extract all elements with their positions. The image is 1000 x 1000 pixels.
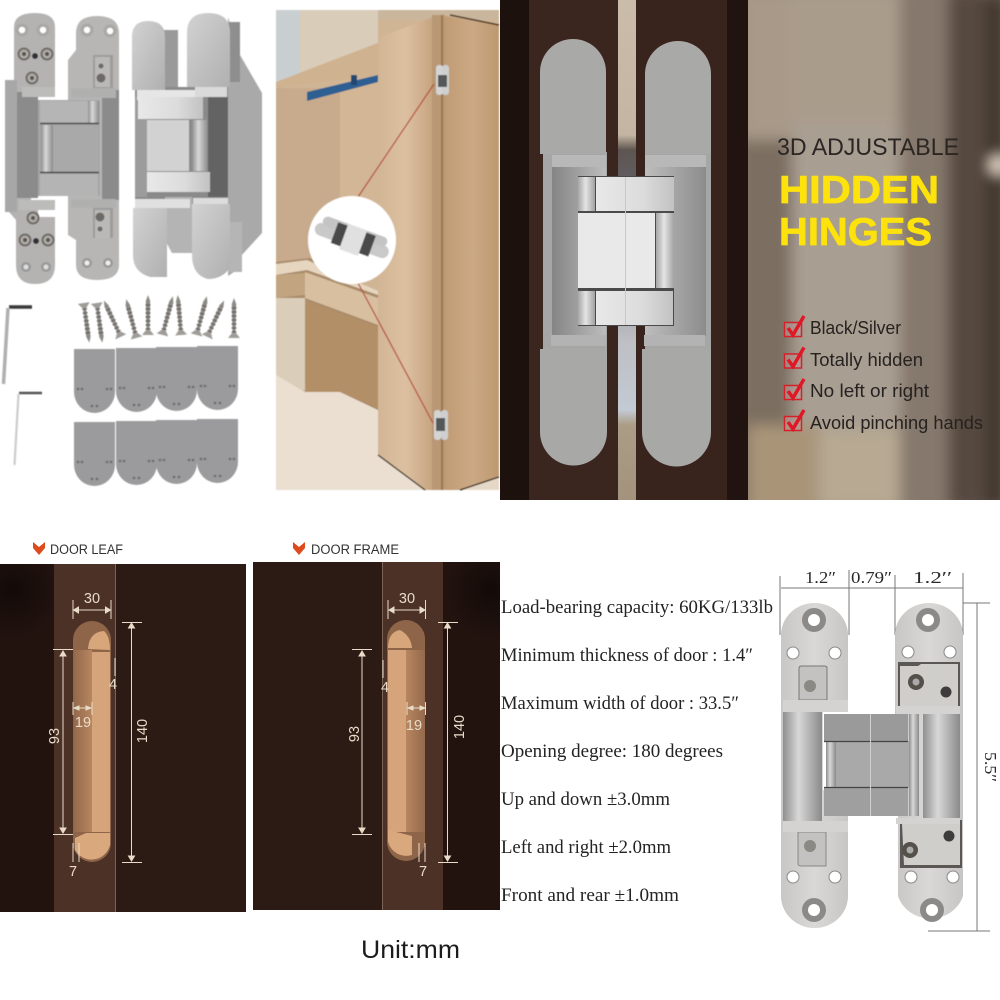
specification list: Maximum width of door : 33.5″ xyxy=(501,693,739,714)
specification list: Opening degree: 180 degrees xyxy=(501,741,723,762)
panel: door leaf diagram: 7 xyxy=(69,864,77,880)
hinge caps xyxy=(540,39,711,466)
dimension text: 5.5′′ xyxy=(981,752,1000,782)
feature list xyxy=(784,316,983,433)
blurred room background xyxy=(740,0,1000,515)
hinge plates xyxy=(781,603,963,928)
panel: door frame diagram: 30 xyxy=(399,591,415,607)
item: Avoid pinching hands: Avoid pinching hands xyxy=(810,413,983,433)
dimension lines xyxy=(780,570,990,931)
specification list: Load-bearing capacity: 60KG/133lb xyxy=(501,597,773,618)
specification list: Up and down ±3.0mm xyxy=(501,789,670,810)
heading: door frame: DOOR FRAME xyxy=(311,542,399,557)
panel: door leaf diagram: 4 xyxy=(109,677,117,693)
heading: HINGES xyxy=(779,211,932,254)
hinge adjustment blocks xyxy=(798,662,962,868)
hinge brackets xyxy=(551,155,706,346)
red callout line, bottom xyxy=(358,283,433,423)
dimension text: 0.79″ xyxy=(851,568,892,587)
dimension labels xyxy=(352,600,458,862)
icon: small hex key xyxy=(14,393,42,465)
heading: HIDDEN xyxy=(779,169,939,212)
panel: door frame diagram: 4 xyxy=(381,680,389,696)
hinge body xyxy=(543,152,711,350)
hinge: front view with caps xyxy=(132,13,262,279)
screws row xyxy=(78,295,240,343)
dimension text: 1.2″ xyxy=(805,568,836,587)
specification list: Minimum thickness of door : 1.4″ xyxy=(501,645,753,666)
panel: hero image, hinge on dark door xyxy=(500,0,1000,515)
wardrobe rail xyxy=(307,75,378,101)
specification list: Left and right ±2.0mm xyxy=(501,837,671,858)
item: Totally hidden: Totally hidden xyxy=(810,350,923,370)
unit note: Unit:mm xyxy=(361,936,460,964)
hinge: back view, right leaf xyxy=(68,16,119,280)
mortise recess xyxy=(387,620,425,861)
red callout line, top xyxy=(358,84,434,197)
small hinge, bottom xyxy=(434,410,448,440)
door panels xyxy=(378,15,499,490)
item: No left or right: No left or right xyxy=(810,381,929,401)
panel: door leaf diagram: 93 xyxy=(47,728,63,744)
room background xyxy=(276,10,499,490)
panel: product kit photo xyxy=(4,13,262,486)
specification list: Front and rear ±1.0mm xyxy=(501,885,679,906)
heading xyxy=(777,134,959,254)
dimension text xyxy=(805,568,1000,782)
callout circle with hinge xyxy=(308,196,396,284)
panel: door frame diagram xyxy=(253,562,500,910)
mortise recess xyxy=(73,621,111,862)
panel: door leaf diagram: 140 xyxy=(135,719,151,743)
icon: large hex key xyxy=(4,307,32,384)
hinge: back view, left leaf xyxy=(5,13,55,284)
dimension text: 1.2′′ xyxy=(913,568,952,587)
dimension labels xyxy=(53,600,142,862)
heading: door leaf: DOOR LEAF xyxy=(50,542,123,557)
dimensioned hinge diagram xyxy=(780,568,1000,931)
item: Black/Silver xyxy=(784,316,901,338)
small hinge, top xyxy=(436,65,449,95)
hinge knuckle xyxy=(578,176,674,326)
panel: door frame diagram: 19 xyxy=(406,718,422,734)
panel: door leaf diagram: 19 xyxy=(75,715,91,731)
cover plates xyxy=(74,346,238,486)
panel: door frame diagram: 93 xyxy=(347,726,363,742)
heading: 3D ADJUSTABLE xyxy=(777,134,959,161)
door wood xyxy=(500,0,748,500)
item: Black/Silver: Black/Silver xyxy=(810,318,901,338)
panel: door frame diagram: 7 xyxy=(419,864,427,880)
hinge: back view, centre knuckle xyxy=(38,100,100,196)
specification list xyxy=(501,597,773,906)
panel: door frame diagram: 140 xyxy=(452,715,468,739)
panel: door leaf diagram xyxy=(0,540,246,912)
hinge body and knuckle xyxy=(783,700,960,832)
panel: door leaf diagram: 30 xyxy=(84,591,100,607)
panel: installed door photo xyxy=(276,10,499,490)
hinge mounting holes xyxy=(787,608,959,922)
